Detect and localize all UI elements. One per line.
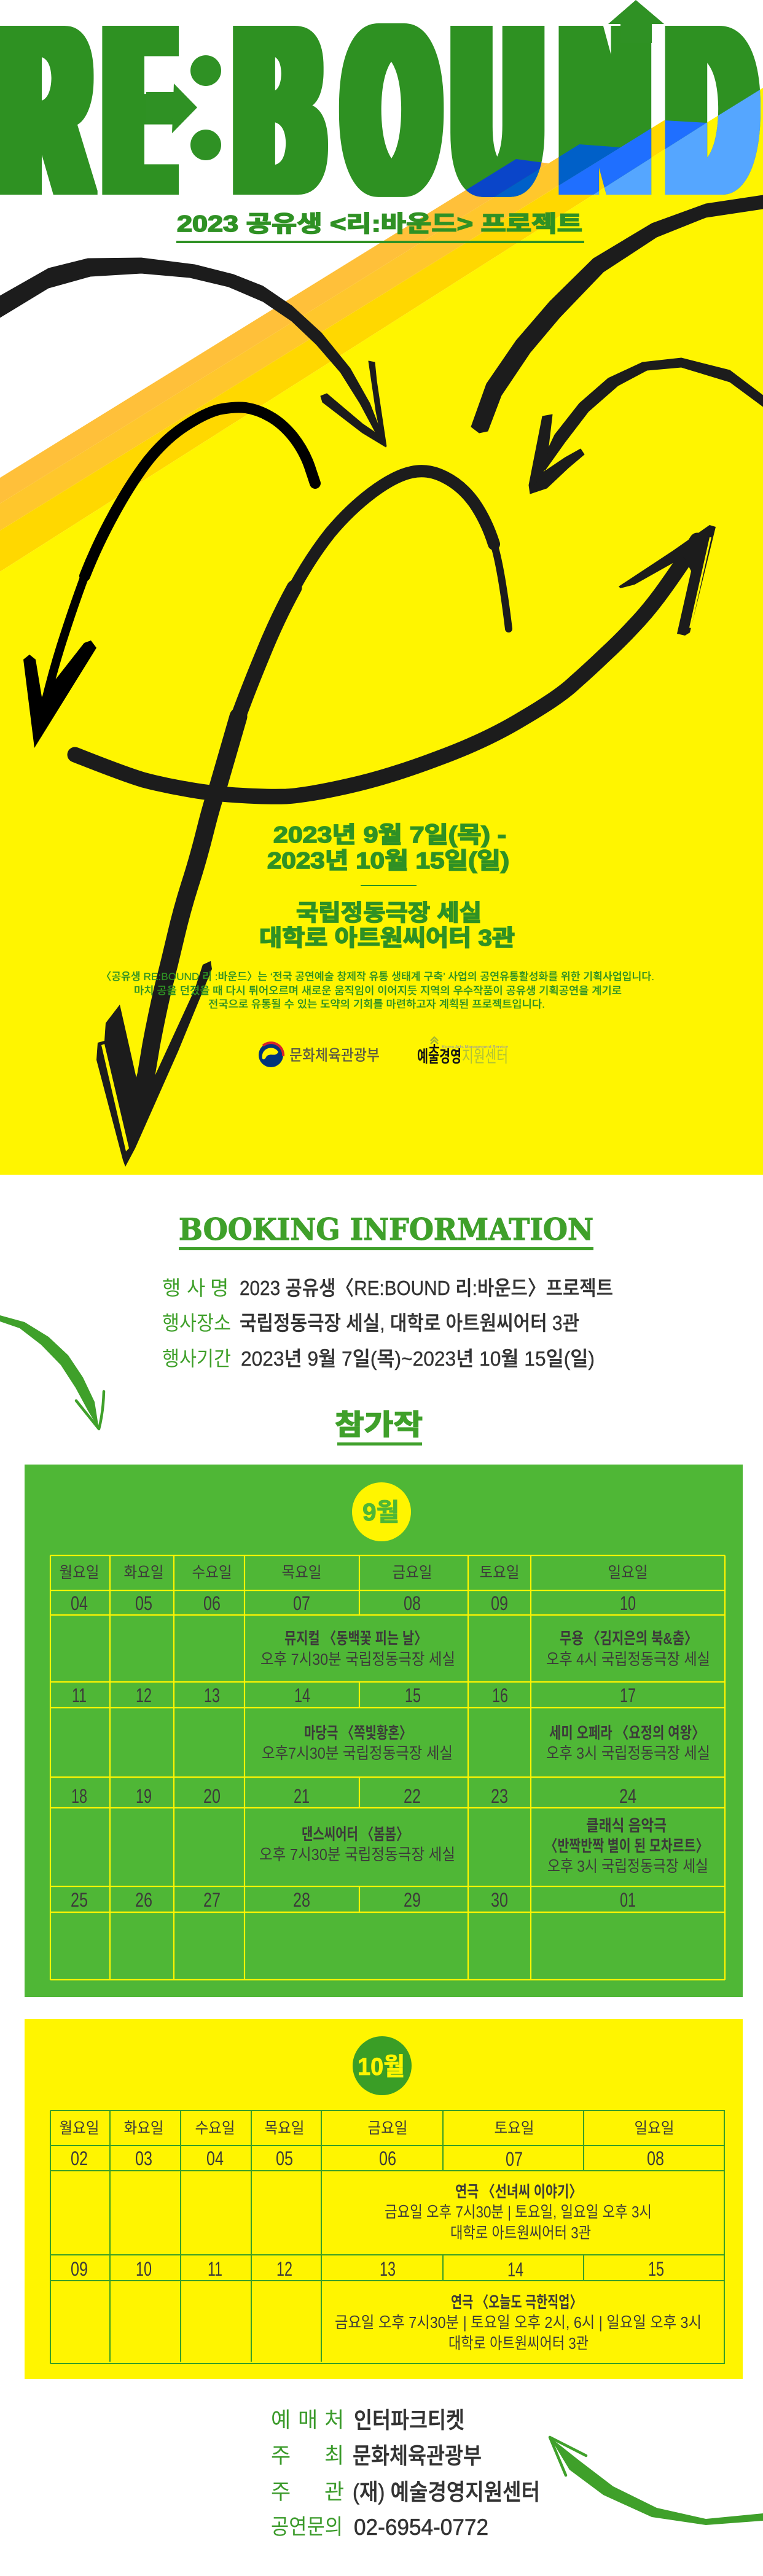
dates: week 1 bbox=[71, 1592, 636, 1614]
table grid: September bbox=[50, 1555, 725, 1980]
events: week 3: 오후 7시30분 국립정동극장 세실 bbox=[259, 1845, 455, 1864]
logo: Korea Arts Management Service: 예술경영 bbox=[417, 1048, 461, 1066]
month badge: October bbox=[353, 2036, 412, 2095]
arrow: black left arc pointing down bbox=[23, 407, 315, 748]
logo: Korea Arts Management Service: Korea Arts Management Service bbox=[442, 1045, 508, 1049]
arrow: green arrow pointing down to participants bbox=[0, 1315, 104, 1429]
weekday headers bbox=[59, 2120, 675, 2137]
dates: week 4: 30 bbox=[491, 1889, 508, 1911]
dates: first week: 04 bbox=[206, 2147, 224, 2169]
venues: 대학로 아트원씨어터 3관 bbox=[259, 925, 515, 951]
dates: week 2: 14 bbox=[294, 1684, 310, 1706]
weekday headers: 일요일 bbox=[608, 1564, 648, 1581]
arrow: top-left arc into centre bbox=[0, 258, 386, 447]
project description: 〈공유생 RE:BOUND 리 :바운드〉는 ‘전국 공연예술 창제작 유통 생태계 구축’ 사업의 공연유통활성화를 위한 기획사업입니다. bbox=[101, 971, 654, 983]
hero poster background with diagonal rebound stripes bbox=[0, 88, 763, 1175]
dates: second week: 09 bbox=[71, 2258, 88, 2280]
dates: week 1: 10 bbox=[620, 1592, 636, 1614]
contact and organiser details: 공연문의 bbox=[271, 2515, 343, 2539]
event dates bbox=[267, 822, 509, 873]
dates: week 3: 23 bbox=[491, 1785, 508, 1807]
month badge: September bbox=[352, 1482, 411, 1541]
dates: week 4: 25 bbox=[71, 1889, 88, 1911]
dates: week 3: 20 bbox=[203, 1785, 221, 1807]
event dates: 2023년 10월 15일(일) bbox=[267, 848, 509, 873]
dates: week 1: 05 bbox=[135, 1592, 152, 1614]
arrow: top-right large arc bbox=[471, 195, 763, 433]
weekday headers: 금요일 bbox=[392, 1564, 432, 1581]
contact and organiser details: 문화체육관광부 bbox=[353, 2443, 482, 2469]
events: week 3 bbox=[259, 1816, 708, 1875]
divider bbox=[361, 885, 417, 886]
dates: week 2: 15 bbox=[405, 1684, 421, 1706]
dates: week 3: 21 bbox=[294, 1785, 310, 1807]
weekday headers: 수요일 bbox=[192, 1564, 232, 1581]
weekday headers: 일요일 bbox=[634, 2120, 675, 2137]
dates: week 1: 04 bbox=[71, 1592, 88, 1614]
weekday headers: 토요일 bbox=[479, 1564, 520, 1581]
dates: week 4: 28 bbox=[293, 1889, 310, 1911]
contact and organiser details: 주관 bbox=[271, 2480, 344, 2504]
arrow: big bounce sweeping to the bottom tip bbox=[96, 471, 509, 1167]
weekday headers: 월요일 bbox=[59, 1564, 100, 1581]
events: week 2: 세미 오페라 〈요정의 여왕〉 bbox=[549, 1724, 705, 1742]
dates: first week: 05 bbox=[276, 2147, 293, 2169]
weekday headers bbox=[59, 1564, 648, 1581]
booking details: 행사기간 bbox=[162, 1347, 231, 1370]
event: first week: 대학로 아트원씨어터 3관 bbox=[450, 2224, 591, 2242]
dates: week 3: 24 bbox=[619, 1785, 636, 1807]
contact and organiser details bbox=[271, 2408, 540, 2540]
dates: week 1: 09 bbox=[491, 1592, 508, 1614]
subtitle bbox=[176, 211, 584, 243]
month badge: September: 9월 bbox=[362, 1499, 399, 1526]
dates: first week: 08 bbox=[647, 2147, 664, 2169]
title: RE:BOUND bbox=[0, 0, 761, 197]
weekday headers: 금요일 bbox=[367, 2120, 408, 2137]
dates: second week bbox=[71, 2258, 664, 2281]
contact and organiser details: 주최 bbox=[271, 2444, 344, 2468]
dates: first week: 06 bbox=[379, 2147, 396, 2169]
events: week 3: 클래식 음악극 bbox=[586, 1816, 667, 1835]
contact and organiser details: (재) 예술경영지원센터 bbox=[353, 2480, 540, 2505]
dates: week 3: 19 bbox=[136, 1785, 152, 1807]
month badge: October: 10월 bbox=[358, 2053, 405, 2080]
booking details: 행사장소 bbox=[162, 1312, 231, 1334]
dates: week 1: 08 bbox=[404, 1592, 421, 1614]
dates: week 2: 17 bbox=[620, 1684, 636, 1706]
weekday headers: 월요일 bbox=[59, 2120, 100, 2137]
event: first week: 금요일 오후 7시30분 | 토요일, 일요일 오후 3시 bbox=[385, 2203, 652, 2221]
subtitle: 2023 공유생 <리:바운드> 프로젝트 bbox=[177, 211, 582, 236]
logo: Korea Arts Management Service bbox=[417, 1037, 508, 1066]
dates: week 4: 27 bbox=[203, 1889, 221, 1911]
dates: second week: 12 bbox=[276, 2258, 292, 2280]
weekday headers: 수요일 bbox=[195, 2120, 235, 2137]
dates: week 1: 07 bbox=[293, 1592, 310, 1614]
heading: participating works: 참가작 bbox=[335, 1409, 423, 1441]
panel: October calendar bbox=[25, 2019, 743, 2379]
booking details: 국립정동극장 세실, 대학로 아트원씨어터 3관 bbox=[240, 1312, 579, 1334]
event: second week: 금요일 오후 7시30분 | 토요일 오후 2시, 6시 | 일요일 오후 3시 bbox=[335, 2313, 702, 2332]
events: week 2: 마당극 〈쪽빛황혼〉 bbox=[304, 1724, 412, 1742]
dates: week 4 bbox=[71, 1889, 636, 1911]
weekday headers: 목요일 bbox=[281, 1564, 322, 1581]
events: week 2: 오후7시30분 국립정동극장 세실 bbox=[262, 1744, 453, 1762]
event: second week: 연극 〈오늘도 극한직업〉 bbox=[451, 2293, 582, 2311]
dates: second week: 10 bbox=[136, 2258, 152, 2280]
project description: 마치 공을 던졌을 때 다시 튀어오르며 새로운 움직임이 이어지듯 지역의 우수작품이 공유생 기획공연을 계기로 bbox=[134, 985, 622, 997]
dates: second week: 13 bbox=[380, 2258, 396, 2280]
events: week 2 bbox=[262, 1724, 710, 1762]
events: week 2: 오후 3시 국립정동극장 세실 bbox=[546, 1744, 710, 1762]
dates: week 3: 22 bbox=[404, 1785, 421, 1807]
arrow: green arrow pointing up to contacts bbox=[550, 2437, 763, 2525]
events: week 1 bbox=[260, 1629, 710, 1668]
booking details bbox=[162, 1277, 613, 1370]
project description: 전국으로 유통될 수 있는 도약의 기회를 마련하고자 계획된 프로젝트입니다. bbox=[208, 998, 545, 1010]
dates: week 2: 11 bbox=[72, 1684, 87, 1706]
logo: Ministry of Culture, Sports and Tourism bbox=[259, 1043, 380, 1067]
dates: week 2 bbox=[72, 1684, 636, 1706]
dates: second week: 14 bbox=[507, 2259, 523, 2281]
booking details: 행사명 bbox=[162, 1277, 229, 1299]
project description bbox=[101, 971, 654, 1010]
weekday headers: 화요일 bbox=[124, 1564, 163, 1581]
panel: September calendar bbox=[25, 1465, 743, 1997]
dates: week 2: 13 bbox=[204, 1684, 220, 1706]
dates: week 1: 06 bbox=[203, 1592, 221, 1614]
dates: first week: 03 bbox=[135, 2147, 152, 2169]
dates: week 4: 29 bbox=[404, 1889, 421, 1911]
events: week 3: 댄스씨어터 〈봄봄〉 bbox=[302, 1825, 409, 1843]
booking details: 2023년 9월 7일(목)~2023년 10월 15일(일) bbox=[241, 1347, 595, 1370]
events: week 1: 무용 〈김지은의 북&춤〉 bbox=[560, 1629, 697, 1648]
table grid: October bbox=[50, 2111, 725, 2364]
arrow: right inner arc bbox=[529, 358, 763, 494]
event: first week: 연극 〈선녀씨 이야기〉 bbox=[455, 2182, 582, 2201]
contact and organiser details: 02-6954-0772 bbox=[354, 2515, 488, 2540]
weekday headers: 목요일 bbox=[264, 2120, 305, 2137]
dates: week 3: 18 bbox=[71, 1785, 87, 1807]
venues bbox=[259, 900, 515, 951]
events: week 1: 오후 4시 국립정동극장 세실 bbox=[546, 1650, 710, 1668]
event dates: 2023년 9월 7일(목) - bbox=[273, 822, 506, 847]
heading: booking information: BOOKING INFORMATION bbox=[179, 1212, 593, 1247]
dates: first week: 07 bbox=[506, 2148, 523, 2170]
weekday headers: 토요일 bbox=[494, 2120, 534, 2137]
dates: second week: 15 bbox=[648, 2258, 664, 2280]
contact and organiser details: 예매처 bbox=[271, 2408, 344, 2432]
dates: week 2: 16 bbox=[492, 1684, 508, 1706]
venues: 국립정동극장 세실 bbox=[296, 900, 482, 925]
logo: Ministry of Culture, Sports and Tourism: 문화체육관광부 bbox=[289, 1047, 380, 1064]
dates: first week: 02 bbox=[71, 2147, 88, 2169]
events: week 3: 오후 3시 국립정동극장 세실 bbox=[547, 1857, 708, 1875]
events: week 1: 오후 7시30분 국립정동극장 세실 bbox=[260, 1650, 455, 1668]
events: week 3: 〈반짝반짝 별이 된 모차르트〉 bbox=[545, 1837, 708, 1855]
dates: week 3 bbox=[71, 1785, 636, 1807]
contact and organiser details: 인터파크티켓 bbox=[354, 2408, 464, 2433]
dates: second week: 11 bbox=[208, 2258, 222, 2280]
event: second week: 대학로 아트원씨어터 3관 bbox=[448, 2334, 589, 2352]
event: first week bbox=[385, 2182, 652, 2242]
dates: week 2: 12 bbox=[136, 1684, 152, 1706]
dates: week 4: 26 bbox=[135, 1889, 152, 1911]
events: week 1: 뮤지컬 〈동백꽃 피는 날〉 bbox=[284, 1629, 427, 1648]
event: second week bbox=[335, 2293, 702, 2352]
arrow: smile curve rising to the right bbox=[75, 525, 716, 796]
dates: first week bbox=[71, 2147, 664, 2170]
dates: week 4: 01 bbox=[620, 1889, 636, 1911]
booking details: 2023 공유생〈RE:BOUND 리:바운드〉프로젝트 bbox=[240, 1277, 613, 1299]
logo: Korea Arts Management Service: 지원센터 bbox=[462, 1048, 508, 1066]
weekday headers: 화요일 bbox=[124, 2120, 163, 2137]
